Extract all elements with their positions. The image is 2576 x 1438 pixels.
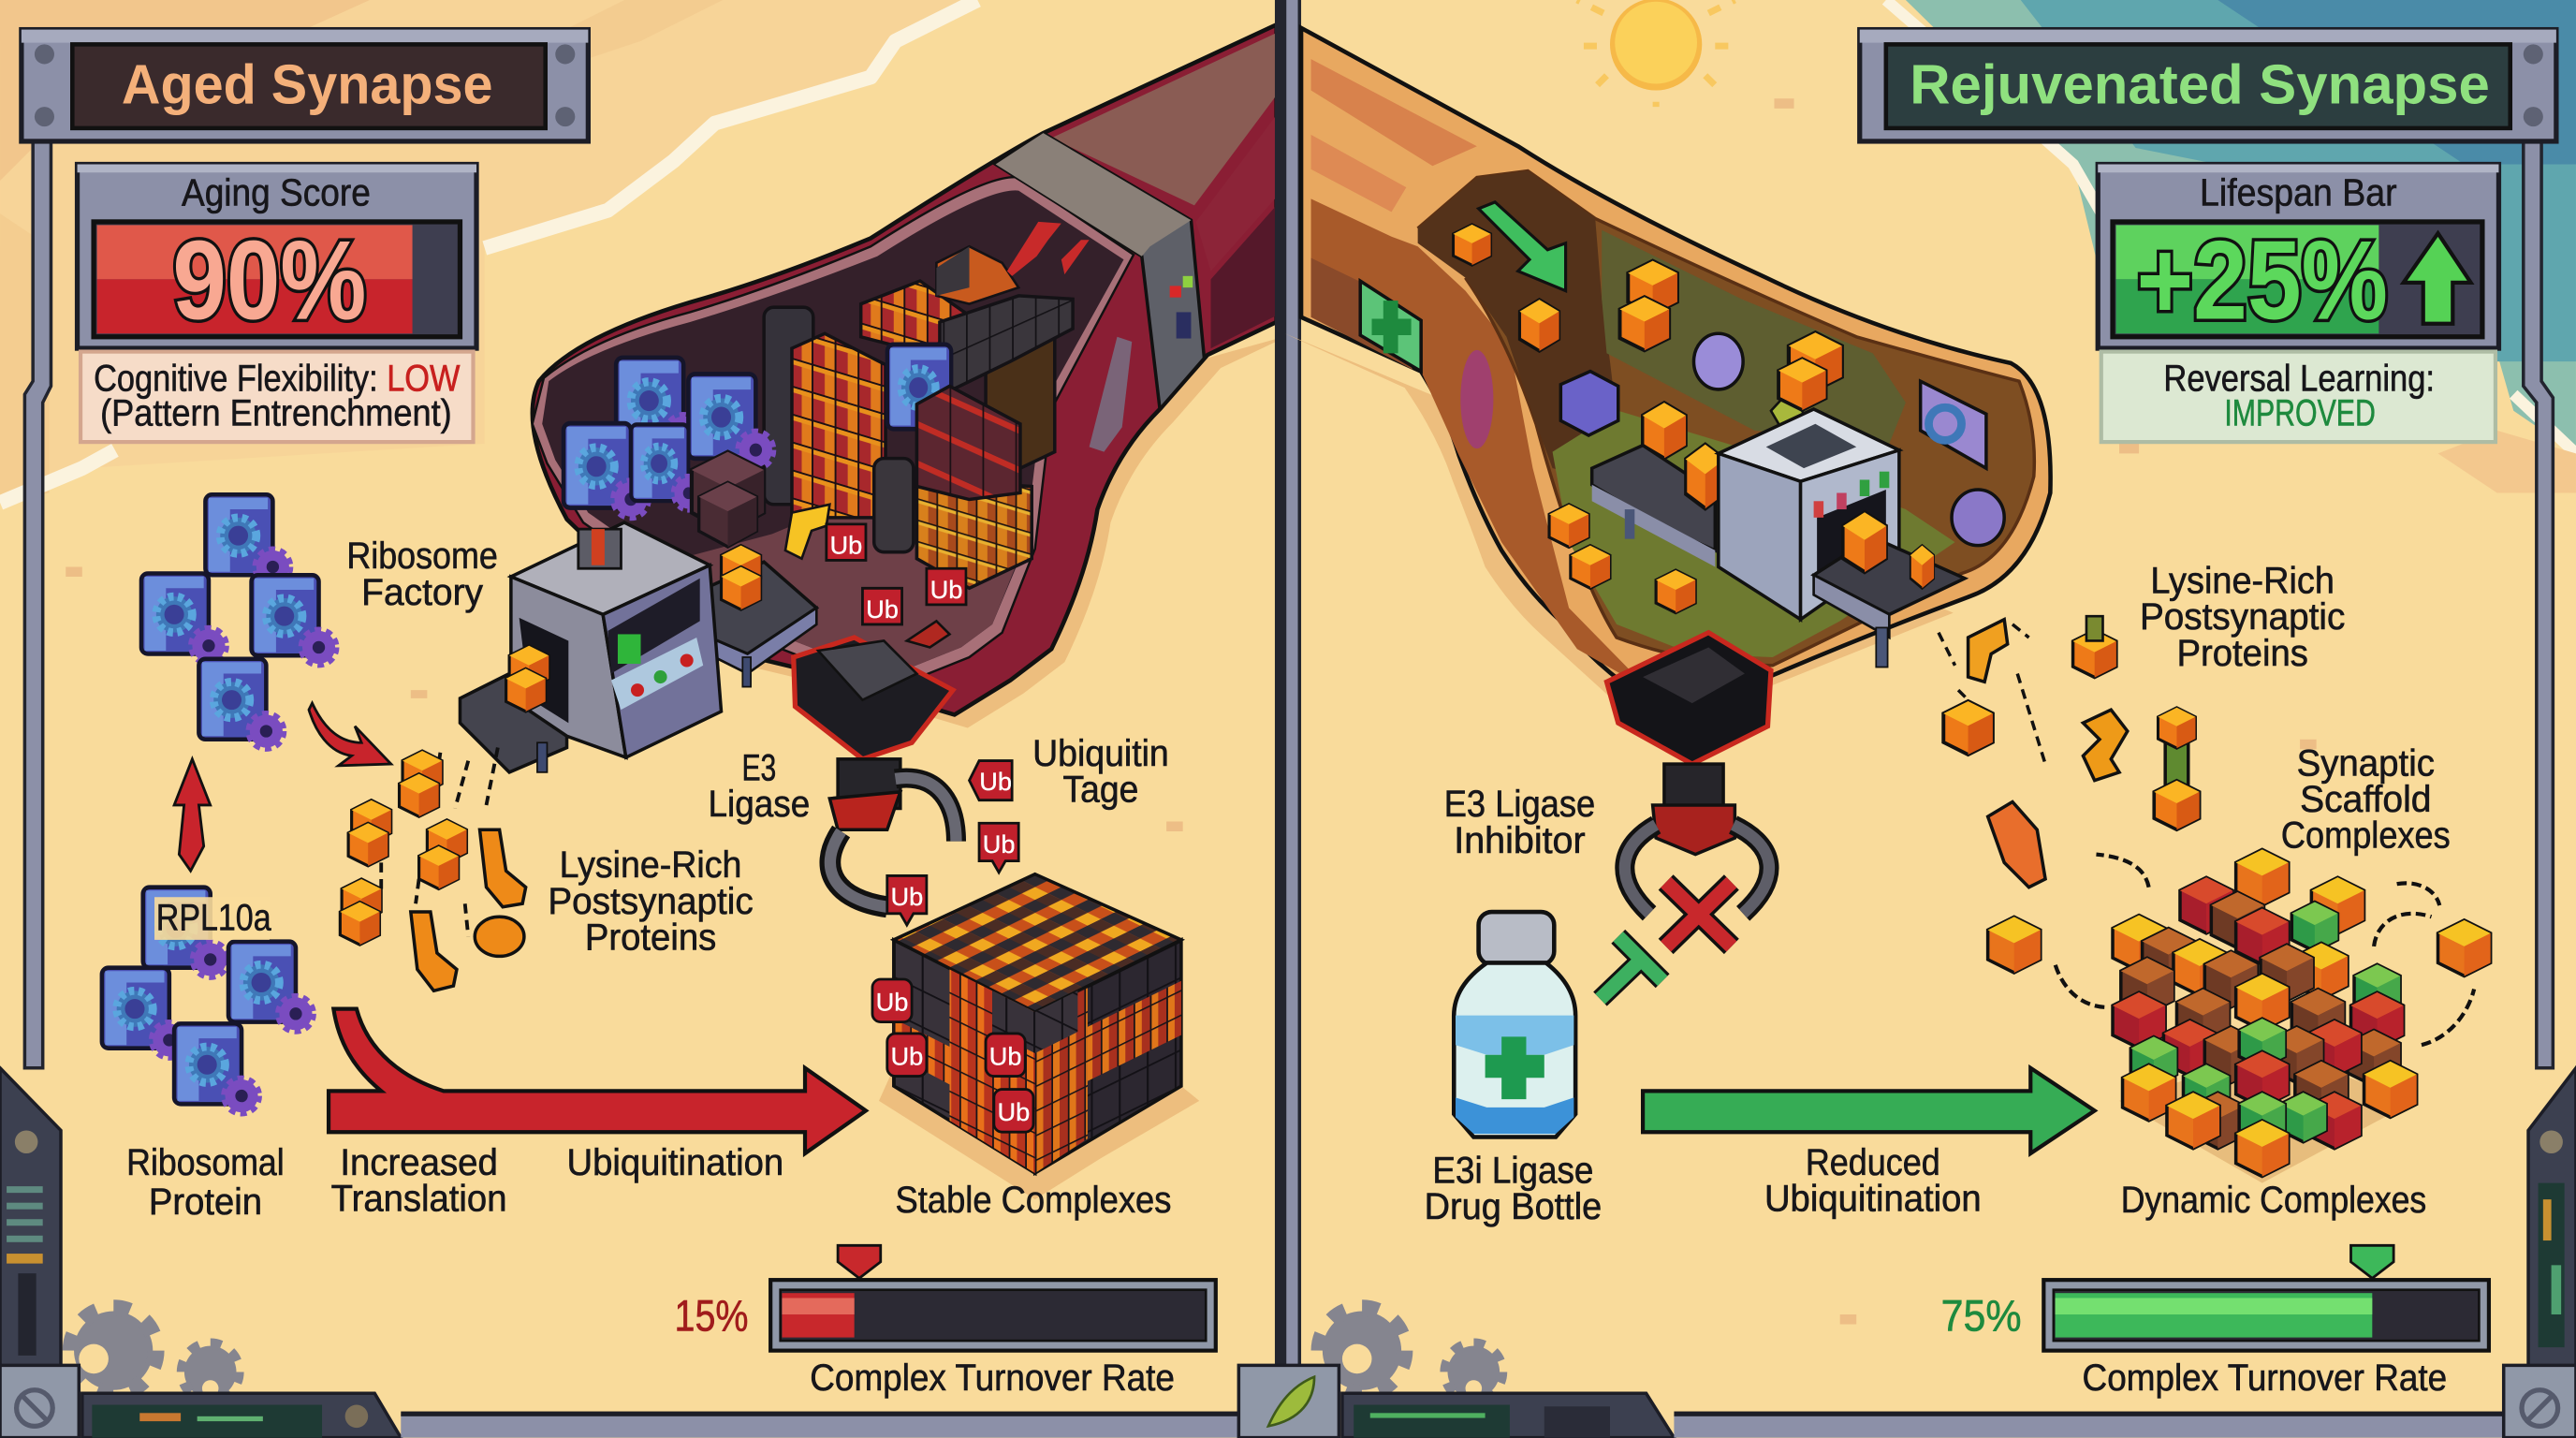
label: lysine-rich postsynaptic proteins right: Lysine-Rich xyxy=(2150,561,2334,602)
lifespan bar panel: Lifespan Bar xyxy=(2200,170,2397,213)
sun xyxy=(1577,0,1734,107)
arrow: curved down xyxy=(309,703,391,766)
ubiquitin tags on cube: Ub xyxy=(989,1041,1022,1070)
label: synaptic scaffold complexes xyxy=(2281,742,2451,857)
ubiquitin tags in tube: Ub xyxy=(930,575,962,604)
callout: cognitive flexibility: Cognitive Flexibility: LOW xyxy=(94,359,461,400)
gears bottom left xyxy=(71,1308,239,1401)
label: E3 ligase: Ligase xyxy=(708,784,810,825)
label: increased translation xyxy=(331,1142,506,1219)
icon: green arrow in tube xyxy=(1479,202,1566,291)
arrow: increased translation to ubiquitination xyxy=(329,1009,866,1153)
cargo: rubble and dark cube xyxy=(936,246,1018,304)
label: lysine-rich postsynaptic proteins right xyxy=(2140,561,2345,674)
callout: reversal learning xyxy=(2101,352,2496,442)
turnover gauge aged xyxy=(770,1245,1216,1351)
machine: ribosome factory xyxy=(506,522,722,757)
ubiquitin tags on cube: Ub xyxy=(998,1097,1030,1126)
ubiquitin tags in tube: Ub xyxy=(866,594,899,624)
icon: inhibited E3 ligase claw xyxy=(1606,633,1771,914)
label: ubiquitination: Ubiquitination xyxy=(567,1142,783,1183)
label: synaptic scaffold complexes: Synaptic xyxy=(2297,742,2435,784)
turnover value 75%: 75% xyxy=(1941,1292,2022,1342)
lifespan bar panel: +25% xyxy=(2136,218,2388,343)
label: lysine-rich postsynaptic proteins right: Postsynaptic xyxy=(2140,596,2345,638)
left conveyor of factory xyxy=(460,666,567,772)
label: ribosome factory xyxy=(346,536,498,613)
cargo: dark gray block xyxy=(940,296,1073,391)
cargo: blue ribosome cubes xyxy=(564,345,967,517)
ubiquitin tags on cube: Ub xyxy=(983,829,1015,858)
label: ribosome factory: Ribosome xyxy=(346,536,498,577)
icon: free proteins right xyxy=(1939,616,2491,976)
icon: green inhibitor xyxy=(1600,936,1662,999)
icon: red X xyxy=(1666,882,1732,946)
label: E3 ligase inhibitor xyxy=(1444,784,1595,861)
label: ubiquitin tag: Tage xyxy=(1063,769,1138,810)
callout: cognitive flexibility xyxy=(80,352,474,442)
title plate: rejuvenated synapse: Rejuvenated Synapse xyxy=(1910,53,2490,116)
icon: motion arcs around dynamic complex xyxy=(2056,855,2474,1045)
bottom rail left xyxy=(401,1412,1238,1438)
cargo: dark red stack xyxy=(916,386,1020,500)
lifespan bar panel xyxy=(2098,165,2498,348)
aging score panel xyxy=(78,165,476,348)
ribosomal protein cluster bottom with RPL10a: RPL10a xyxy=(156,897,271,938)
cargo: yellow protein xyxy=(785,505,829,559)
title plate: aged synapse xyxy=(22,30,588,141)
ribosomal protein cluster bottom with RPL10a xyxy=(102,888,313,1112)
cargo: dark pillar xyxy=(764,307,813,505)
label: E3i ligase drug bottle: Drug Bottle xyxy=(1425,1186,1602,1227)
label: dynamic complexes: Dynamic Complexes xyxy=(2121,1180,2426,1221)
label: ubiquitin tag xyxy=(1032,733,1169,810)
gears bottom middle xyxy=(1319,1308,1501,1401)
ubiquitin tags on cube: Ub xyxy=(979,767,1012,796)
label: lysine-rich postsynaptic proteins right: Proteins xyxy=(2176,633,2308,674)
icon: red shard arrow xyxy=(1007,222,1090,276)
dynamic complex cluster xyxy=(2113,849,2417,1183)
title plate: aged synapse: Aged Synapse xyxy=(122,53,493,116)
right conveyor of factory xyxy=(698,546,816,687)
panel: rejuvenated synapse xyxy=(1238,28,2576,1438)
cargo: brown rear block xyxy=(986,337,1055,485)
right post xyxy=(2524,141,2553,1068)
big tube: rejuvenated postsynaptic compartment xyxy=(1284,28,2051,718)
cargo: amber stack xyxy=(916,479,1032,588)
label: reduced ubiquitination: Reduced xyxy=(1806,1142,1940,1183)
big tube: aged postsynaptic compartment xyxy=(533,24,1290,727)
ubiquitin tags on cube: Ub xyxy=(876,987,908,1016)
ribosomal protein cluster top xyxy=(141,494,335,748)
control panel left edge xyxy=(0,1068,61,1380)
cargo: dark pillar small xyxy=(874,459,914,552)
machine: rejuvenated ribosome factory xyxy=(1719,409,1899,620)
label: E3i ligase drug bottle xyxy=(1425,1151,1602,1227)
callout: reversal learning: Reversal Learning: xyxy=(2163,359,2435,400)
label: increased translation: Increased xyxy=(340,1142,498,1183)
label: ribosomal protein: Ribosomal xyxy=(126,1142,285,1183)
label: synaptic scaffold complexes: Complexes xyxy=(2281,815,2451,857)
arrow: curved up xyxy=(174,759,211,871)
label: reduced ubiquitination: Ubiquitination xyxy=(1764,1178,1982,1219)
label: complex turnover rate aged: Complex Turnover Rate xyxy=(810,1357,1175,1399)
callout: reversal learning: IMPROVED xyxy=(2224,393,2376,434)
cargo: orange proteins in tube xyxy=(1454,225,1842,613)
label: E3i ligase drug bottle: E3i Ligase xyxy=(1432,1151,1593,1192)
label: E3 ligase: E3 xyxy=(741,748,776,789)
label: ribosomal protein xyxy=(126,1142,285,1223)
control panel right edge xyxy=(2528,1068,2576,1380)
label: increased translation: Translation xyxy=(331,1178,506,1219)
aging score panel: Aging Score xyxy=(182,170,371,213)
icon: drug bottle xyxy=(1454,912,1575,1137)
divider xyxy=(1275,0,1301,1438)
aging score panel: 90% xyxy=(172,218,366,343)
console bottom middle xyxy=(1342,1393,1674,1438)
stable complex cube xyxy=(879,874,1199,1199)
label: synaptic scaffold complexes: Scaffold xyxy=(2300,779,2431,820)
ubiquitin tags in tube xyxy=(827,524,966,647)
cargo: orange wall xyxy=(792,333,886,518)
label: complex turnover rate rejuvenated: Complex Turnover Rate xyxy=(2083,1357,2447,1399)
label: E3 ligase xyxy=(708,748,810,825)
ubiquitin tags in tube: Ub xyxy=(830,530,862,559)
label: lysine-rich postsynaptic proteins: Postsynaptic xyxy=(548,881,754,922)
arrow: reduced ubiquitination xyxy=(1643,1068,2095,1153)
cargo: orange top block xyxy=(861,281,966,350)
turnover value 15%: 15% xyxy=(674,1292,748,1342)
label: ribosome factory: Factory xyxy=(361,572,483,613)
left conveyor rejuvenated xyxy=(1592,445,1725,566)
panel: aged synapse xyxy=(0,24,1290,1438)
label: lysine-rich postsynaptic proteins: Lysine-Rich xyxy=(560,844,741,886)
right conveyor rejuvenated xyxy=(1814,512,1965,668)
callout: cognitive flexibility: (Pattern Entrenchment) xyxy=(100,393,452,434)
label: E3 ligase inhibitor: Inhibitor xyxy=(1454,820,1586,861)
label: lysine-rich postsynaptic proteins xyxy=(548,844,754,958)
label: reduced ubiquitination xyxy=(1764,1142,1982,1219)
icon: green cross plate xyxy=(1360,281,1493,448)
turnover gauge rejuvenated xyxy=(2043,1245,2489,1351)
cargo: brown cubes xyxy=(692,452,764,547)
ubiquitin tags on cube: Ub xyxy=(890,882,923,911)
label: E3 ligase inhibitor: E3 Ligase xyxy=(1444,784,1595,825)
corner plate bottom left xyxy=(0,1365,79,1438)
center corner plate with leaf xyxy=(1238,1365,1339,1438)
icon: lysine-rich proteins xyxy=(340,748,526,990)
icon: E3 ligase claw xyxy=(794,638,956,907)
ubiquitin tags on cube xyxy=(872,761,1033,1132)
label: stable complexes: Stable Complexes xyxy=(896,1180,1171,1221)
label: ribosomal protein: Protein xyxy=(149,1181,262,1223)
corner plate bottom right xyxy=(2504,1365,2576,1438)
cargo: purple and blue cubes xyxy=(1560,333,2004,546)
ubiquitin tags on cube: Ub xyxy=(890,1041,923,1070)
title plate: rejuvenated synapse xyxy=(1860,30,2556,141)
console bottom left xyxy=(82,1393,401,1438)
left post xyxy=(24,141,51,1068)
label: lysine-rich postsynaptic proteins: Proteins xyxy=(585,917,716,958)
label: ubiquitin tag: Ubiquitin xyxy=(1032,733,1169,774)
bottom rail right xyxy=(1674,1412,2505,1438)
